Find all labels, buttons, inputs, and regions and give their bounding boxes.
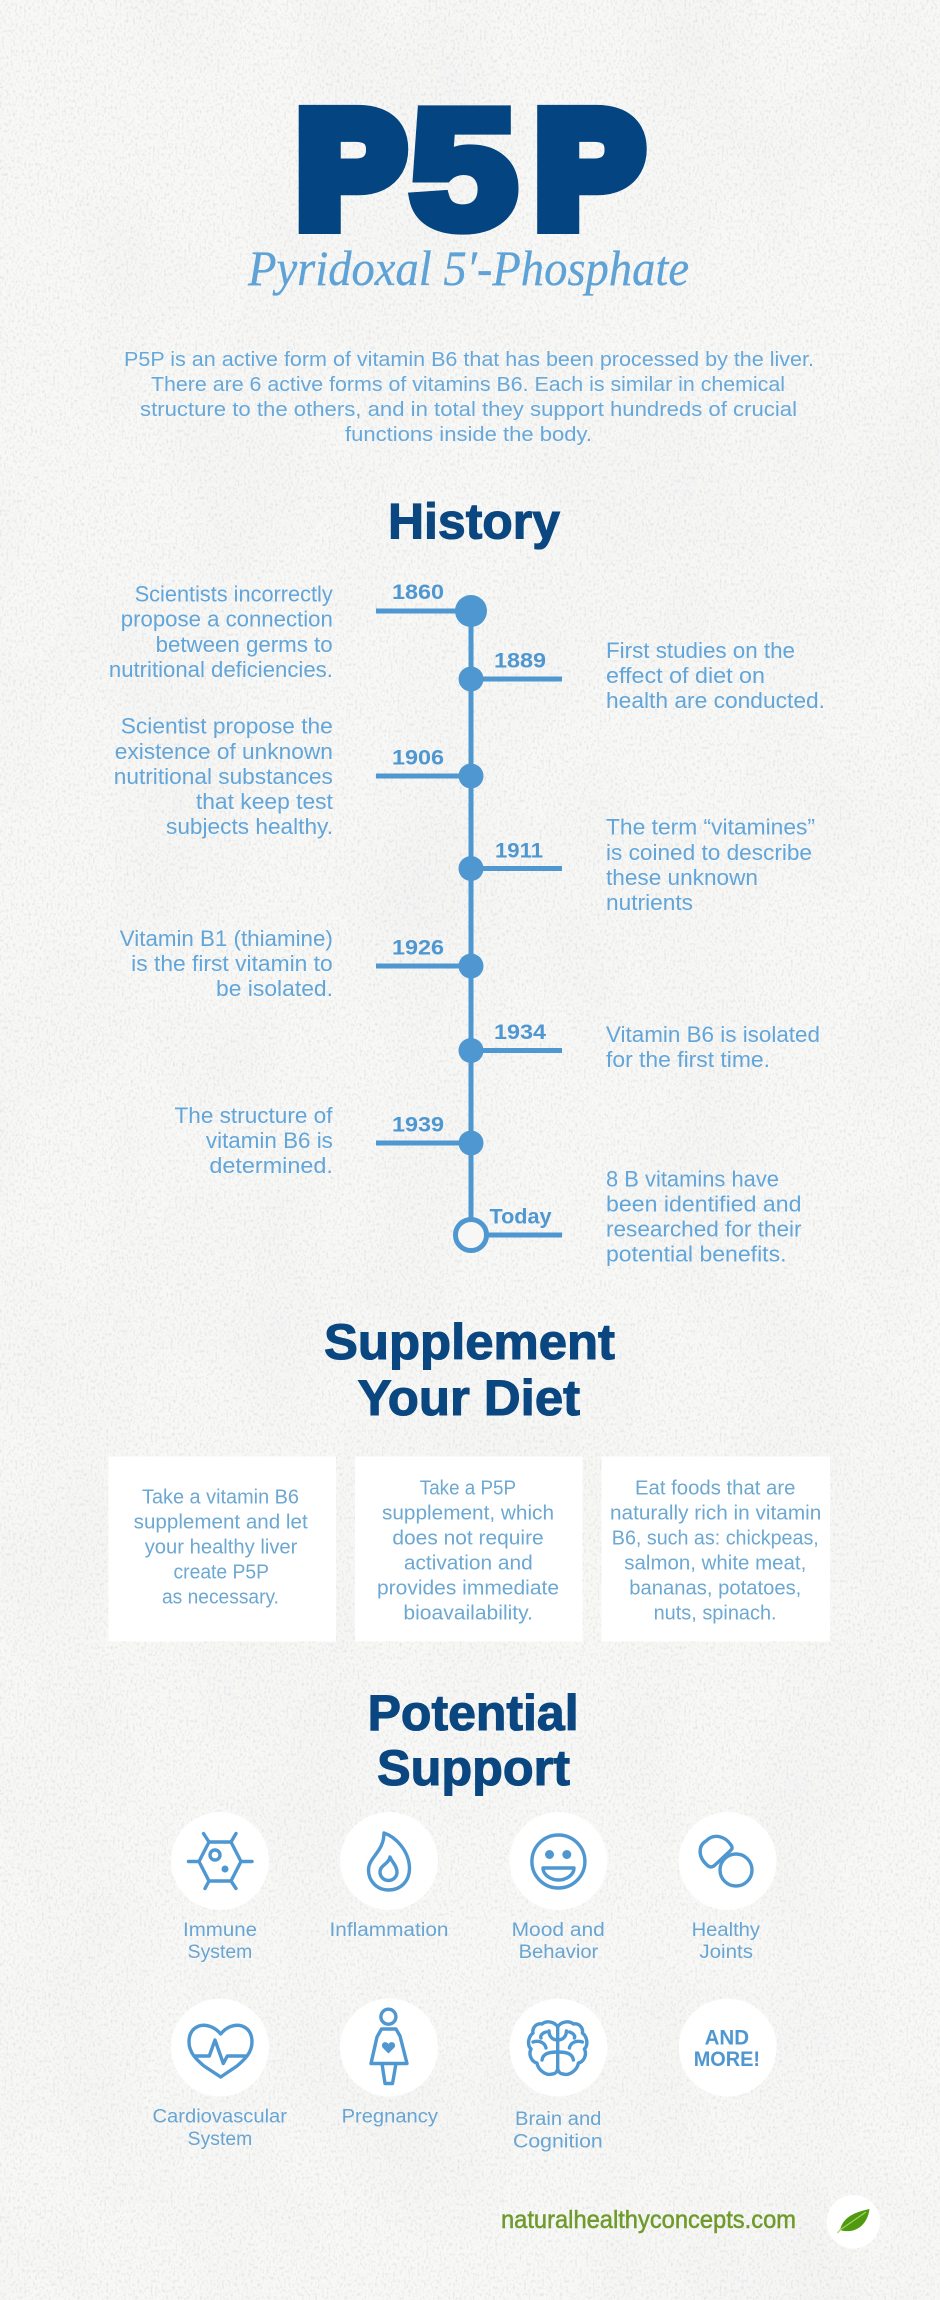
panel: food sources card: salmon, white meat,	[624, 1552, 806, 1574]
text: 1939 event	[174, 1103, 333, 1178]
heading: history: History	[388, 494, 560, 550]
text: 1911 event: The term “vitamines”	[606, 814, 815, 840]
text: 1889 event: First studies on the	[606, 638, 795, 663]
text: 1906 event: that keep test	[196, 789, 333, 814]
panel: and more	[679, 1998, 777, 2096]
label: Healthy	[692, 1920, 761, 1941]
text: 1926 event: be isolated.	[216, 976, 333, 1001]
text: 1926 event: Vitamin B1 (thiamine)	[120, 926, 333, 951]
timeline marker: 1889: 1889	[494, 650, 546, 672]
panel: cardiovascular system	[152, 1998, 288, 2150]
timeline marker: 1934: 1934	[494, 1021, 546, 1044]
timeline chart	[109, 581, 825, 1266]
text: 1906 event: subjects healthy.	[166, 814, 333, 839]
label	[512, 1920, 605, 1963]
icon: heart with pulse	[189, 2025, 252, 2077]
timeline marker: 1906: 1906	[392, 746, 444, 770]
intro text: structure to the others, and in total they support hundreds of crucial	[140, 399, 797, 421]
text: 1926 event: is the first vitamin to	[131, 951, 333, 976]
text: 1934 event: for the first time.	[606, 1047, 770, 1072]
heading: supplement your diet	[324, 1314, 615, 1426]
panel: P5P supplement card: Take a P5P	[420, 1476, 516, 1500]
panel: and more: MORE!	[694, 2048, 760, 2071]
label	[692, 1920, 761, 1963]
label: Behavior	[519, 1942, 599, 1963]
text: 1911 event: is coined to describe	[606, 840, 812, 865]
text: today event: been identified and	[606, 1192, 802, 1216]
panel: vitamin B6 supplement card	[108, 1456, 336, 1642]
timeline marker: 1911	[458, 840, 562, 881]
panel: pregnancy	[340, 1998, 438, 2128]
panel: vitamin B6 supplement card: Take a vitamin B6	[142, 1486, 299, 1508]
timeline marker: 1926	[376, 936, 484, 978]
text: 1926 event	[120, 926, 333, 1001]
label: System	[188, 2129, 252, 2150]
subtitle: Pyridoxal 5′-Phosphate	[247, 240, 689, 296]
timeline marker: 1889	[458, 650, 562, 692]
text: today event: potential benefits.	[606, 1242, 786, 1266]
label: Cardiovascular	[152, 2106, 288, 2128]
timeline marker: 1934	[458, 1021, 562, 1063]
heading: potential support: Support	[377, 1740, 570, 1796]
icon: cell	[188, 1834, 252, 1888]
panel: food sources card	[601, 1456, 830, 1642]
label: Cognition	[513, 2132, 603, 2152]
heading: supplement your diet: Supplement	[324, 1314, 615, 1370]
panel: inflammation	[330, 1812, 448, 1941]
title: P	[536, 80, 643, 258]
title: P	[298, 80, 404, 258]
text: 1860 event: Scientists incorrectly	[135, 582, 333, 606]
text: 1889 event: health are conducted.	[606, 688, 825, 713]
panel: P5P supplement card	[355, 1456, 582, 1642]
intro text	[124, 349, 814, 446]
icon: smiley	[532, 1835, 585, 1888]
label: Immune	[183, 1920, 257, 1941]
text: 1911 event	[606, 814, 815, 915]
icon: pregnant woman	[371, 2009, 407, 2084]
panel: food sources card: bananas, potatoes,	[629, 1576, 801, 1600]
text: 1860 event	[109, 582, 333, 682]
panel: healthy joints	[679, 1812, 777, 1963]
label	[513, 2109, 603, 2152]
icon: flame drop	[368, 1833, 410, 1890]
timeline marker: 1860	[376, 581, 487, 627]
timeline marker: 1926: 1926	[392, 936, 444, 960]
timeline marker: today	[456, 1206, 562, 1250]
text: 1934 event: Vitamin B6 is isolated	[606, 1022, 820, 1047]
text: 1911 event: these unknown	[606, 865, 758, 890]
intro text: There are 6 active forms of vitamins B6. Each is similar in chemical	[151, 374, 785, 396]
panel: food sources card: Eat foods that are	[635, 1476, 795, 1500]
text: 1906 event: Scientist propose the	[121, 714, 333, 738]
timeline marker: today: Today	[490, 1206, 552, 1228]
text: 1939 event: The structure of	[174, 1103, 333, 1128]
icon: leaf logo	[827, 2195, 880, 2248]
text: 1889 event	[606, 638, 825, 713]
intro text: P5P is an active form of vitamin B6 that has been processed by the liver.	[124, 349, 814, 371]
panel: vitamin B6 supplement card: create P5P	[174, 1560, 269, 1584]
heading: potential support: Potential	[368, 1685, 579, 1741]
text: 1860 event: propose a connection	[121, 606, 333, 632]
panel: immune system	[171, 1812, 269, 1963]
panel: P5P supplement card: bioavailability.	[403, 1602, 533, 1624]
heading: supplement your diet: Your Diet	[358, 1370, 580, 1426]
panel: vitamin B6 supplement card: supplement and let	[134, 1510, 308, 1534]
intro text: functions inside the body.	[345, 424, 592, 446]
label: System	[188, 1942, 252, 1963]
label: Joints	[699, 1942, 753, 1963]
panel: vitamin B6 supplement card: your healthy liver	[145, 1536, 298, 1558]
text: today event: researched for their	[606, 1216, 802, 1242]
panel: food sources card: naturally rich in vitamin	[610, 1502, 821, 1524]
label: Pregnancy	[342, 2106, 438, 2128]
panel: mood and behavior	[509, 1812, 607, 1963]
text: 1939 event: vitamin B6 is	[206, 1128, 333, 1153]
timeline marker: 1939	[376, 1114, 484, 1156]
text: 1889 event: effect of diet on	[606, 663, 765, 688]
text: 1906 event	[114, 714, 333, 839]
text: 1860 event: nutritional deficiencies.	[109, 657, 333, 682]
panel: P5P supplement card: provides immediate	[377, 1576, 559, 1600]
panel: vitamin B6 supplement card: as necessary.	[162, 1586, 279, 1608]
text: 1911 event: nutrients	[606, 890, 693, 915]
label	[183, 1920, 257, 1963]
timeline marker: 1906	[376, 746, 484, 788]
icon: joints	[700, 1836, 752, 1886]
text: 1860 event: between germs to	[156, 632, 333, 657]
website url: naturalhealthyconcepts.com	[501, 2206, 796, 2234]
title: 5	[410, 75, 517, 263]
panel: P5P supplement card: supplement, which	[382, 1502, 554, 1524]
timeline spine	[468, 611, 474, 1235]
panel: food sources card: nuts, spinach.	[654, 1602, 777, 1624]
timeline marker: 1860: 1860	[392, 581, 444, 604]
text: 1906 event: existence of unknown	[115, 739, 333, 764]
panel: food sources card: B6, such as: chickpeas,	[612, 1526, 819, 1550]
text: 1906 event: nutritional substances	[114, 764, 333, 789]
heading: potential support	[368, 1685, 579, 1796]
label: Mood and	[512, 1920, 605, 1941]
panel: P5P supplement card: activation and	[404, 1552, 533, 1574]
panel: P5P supplement card: does not require	[392, 1526, 544, 1550]
panel: brain and cognition	[509, 1998, 607, 2152]
text: today event	[606, 1166, 802, 1266]
label: Inflammation	[330, 1920, 448, 1941]
label	[152, 2106, 288, 2150]
label: Brain and	[515, 2109, 601, 2130]
timeline marker: 1939: 1939	[392, 1114, 444, 1136]
icon: brain	[529, 2022, 587, 2074]
panel: and more: AND	[705, 2026, 749, 2050]
text: 1939 event: determined.	[209, 1153, 333, 1178]
text: today event: 8 B vitamins have	[606, 1166, 779, 1192]
text: 1934 event	[606, 1022, 820, 1072]
timeline marker: 1911: 1911	[495, 840, 543, 862]
